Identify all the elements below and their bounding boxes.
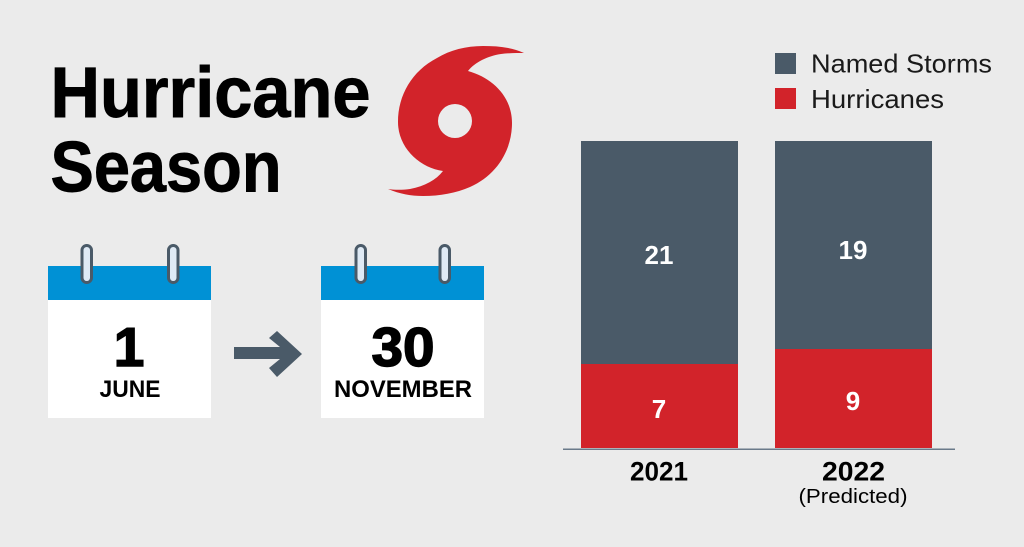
icon: hurricane symbol	[388, 46, 524, 196]
bar: 2021 hurricanes: 7	[652, 394, 666, 424]
axis label: 2022 predicted: (Predicted)	[798, 486, 908, 508]
title: Season	[50, 128, 282, 208]
bar: 2021 named storms	[581, 141, 738, 364]
bar: 2022 named storms: 19	[839, 235, 867, 265]
icon: calendar rings	[356, 246, 450, 282]
title: Hurricane	[50, 54, 370, 133]
calendar: 1 June	[48, 246, 211, 418]
bar: 2022 named storms	[775, 141, 932, 349]
title	[50, 54, 370, 208]
bar: 2021 hurricanes	[581, 364, 738, 448]
bar: 2021 named storms: 21	[645, 240, 673, 270]
date number: 30	[372, 316, 434, 378]
legend: hurricanes: Hurricanes	[811, 86, 944, 114]
legend	[775, 51, 992, 114]
icon: calendar rings	[82, 246, 178, 282]
legend: named storms: Named Storms	[811, 51, 992, 79]
bar: 2022 hurricanes	[775, 349, 932, 448]
month label: NOVEMBER	[334, 376, 472, 403]
date number: 1	[114, 316, 144, 378]
axis label: 2021: 2021	[630, 457, 688, 487]
arrow	[234, 331, 302, 377]
axis label: 2022 predicted	[798, 457, 908, 508]
calendar: 30 November	[321, 246, 484, 418]
bar: 2022 hurricanes: 9	[846, 386, 860, 416]
month label: JUNE	[100, 376, 160, 403]
axis label: 2022 predicted: 2022	[822, 457, 885, 487]
stacked bar chart	[563, 141, 955, 508]
